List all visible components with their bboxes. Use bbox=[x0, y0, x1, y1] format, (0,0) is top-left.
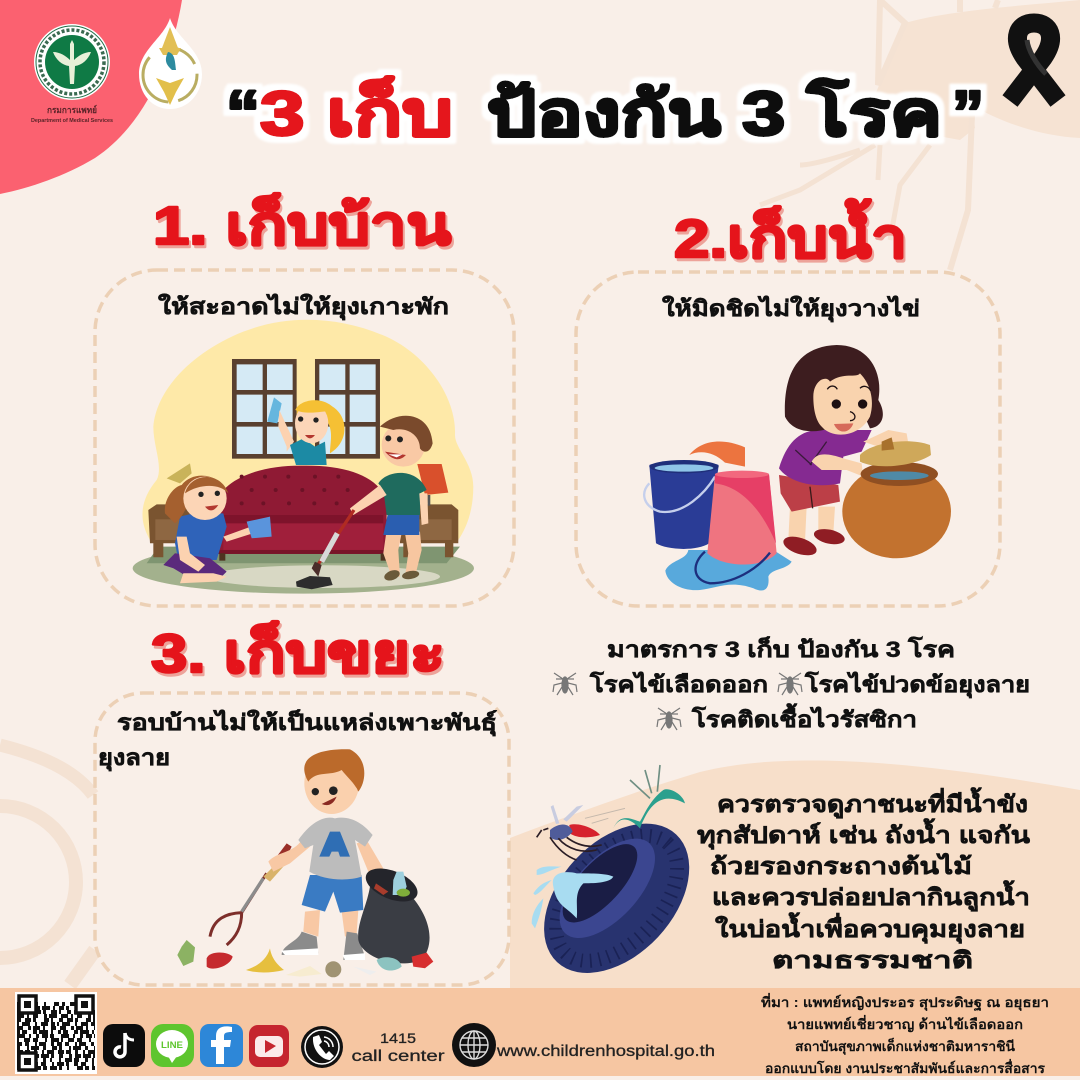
panel 2 dashed frame bbox=[576, 272, 1000, 606]
panel 3 caption: ยุงลาย bbox=[98, 745, 170, 772]
icon: youtube bbox=[249, 1025, 289, 1067]
illustration: boy picking up trash bbox=[177, 749, 433, 977]
disease list: โรคติดเชื้อไวรัสซิกา bbox=[691, 703, 917, 732]
title: ” bbox=[952, 79, 984, 148]
panel 3 caption bbox=[98, 708, 497, 772]
icon: mosquito bbox=[778, 673, 802, 695]
corner shape top left bbox=[0, 0, 182, 194]
heading 2: 2.เก็บน้ำ bbox=[674, 199, 907, 269]
footer bar bbox=[0, 988, 1080, 1076]
call center label: call center bbox=[352, 1048, 445, 1065]
icon: tiktok bbox=[103, 1024, 145, 1067]
icon: line bbox=[151, 1024, 194, 1067]
icon: mosquito bbox=[553, 673, 577, 695]
icon: line: LINE bbox=[161, 1040, 183, 1050]
title: 3 เก็บ bbox=[260, 76, 453, 149]
panel 1 caption: ให้สะอาดไม่ให้ยุงเกาะพัก bbox=[158, 293, 449, 321]
panel 2 caption: ให้มิดชิดไม่ให้ยุงวางไข่ bbox=[662, 295, 920, 323]
disease list bbox=[553, 671, 1030, 732]
advice text block: ตามธรรมชาติ bbox=[772, 947, 973, 973]
QR code bbox=[15, 992, 97, 1074]
measures summary heading: มาตรการ 3 เก็บ ป้องกัน 3 โรค bbox=[607, 635, 955, 662]
icon: mosquito bbox=[657, 708, 681, 730]
panel 3 dashed frame bbox=[95, 693, 509, 985]
logo: hospital emblem bbox=[139, 18, 202, 109]
advice text block: ถ้วยรองกระถางต้นไม้ bbox=[710, 852, 972, 879]
logo: ministry of public health: กรมการแพทย์ bbox=[47, 104, 97, 115]
website url: www.childrenhospital.go.th bbox=[496, 1043, 715, 1060]
source credits: นายแพทย์เชี่ยวชาญ ด้านไข้เลือดออก bbox=[787, 1014, 1023, 1033]
panel 3 caption: รอบบ้านไม่ให้เป็นแหล่งเพาะพันธุ์ bbox=[117, 708, 497, 737]
advice text block bbox=[697, 787, 1030, 973]
call center label bbox=[352, 1030, 445, 1065]
source credits: สถาบันสุขภาพเด็กแห่งชาติมหาราชินี bbox=[795, 1037, 1016, 1055]
logo: ministry of public health bbox=[31, 24, 113, 124]
panel 1 dashed frame bbox=[95, 270, 514, 606]
call center label: 1415 bbox=[380, 1030, 416, 1046]
source credits: ออกแบบโดย งานประชาสัมพันธ์และการสื่อสาร bbox=[765, 1058, 1046, 1076]
advice text block: และควรปล่อยปลากินลูกน้ำ bbox=[712, 880, 1030, 912]
illustration: tire with water and mosquito bbox=[516, 765, 718, 1001]
heading 1: 1. เก็บบ้าน bbox=[153, 194, 451, 256]
title bbox=[226, 76, 984, 149]
disease list: โรคไข้ปวดข้อยุงลาย bbox=[804, 671, 1030, 699]
advice text block: ควรตรวจดูภาชนะที่มีน้ำขัง bbox=[717, 787, 1028, 819]
advice text block: ทุกสัปดาห์ เช่น ถังน้ำ แจกัน bbox=[697, 818, 1030, 850]
illustration: girl closing water jar with buckets bbox=[644, 345, 951, 591]
icon: black mourning ribbon bbox=[1010, 23, 1058, 101]
source credits: ที่มา : แพทย์หญิงประอร สุประดิษฐ ณ อยุธยา bbox=[761, 992, 1049, 1012]
title: ป้องกัน 3 โรค bbox=[487, 77, 942, 149]
icon: telephone bbox=[301, 1026, 343, 1068]
title: “ bbox=[226, 79, 260, 148]
background hill bottom right bbox=[510, 760, 1080, 990]
illustration: children cleaning the house bbox=[133, 320, 474, 594]
source credits bbox=[761, 992, 1049, 1076]
disease list: โรคไข้เลือดออก bbox=[589, 671, 768, 697]
logo: ministry of public health: Department of Medical Services bbox=[31, 118, 113, 124]
icon: facebook bbox=[200, 1024, 243, 1067]
advice text block: ในบ่อน้ำเพื่อควบคุมยุงลาย bbox=[715, 912, 1025, 944]
icon: globe bbox=[452, 1023, 496, 1067]
heading 3: 3. เก็บขยะ bbox=[151, 622, 445, 684]
